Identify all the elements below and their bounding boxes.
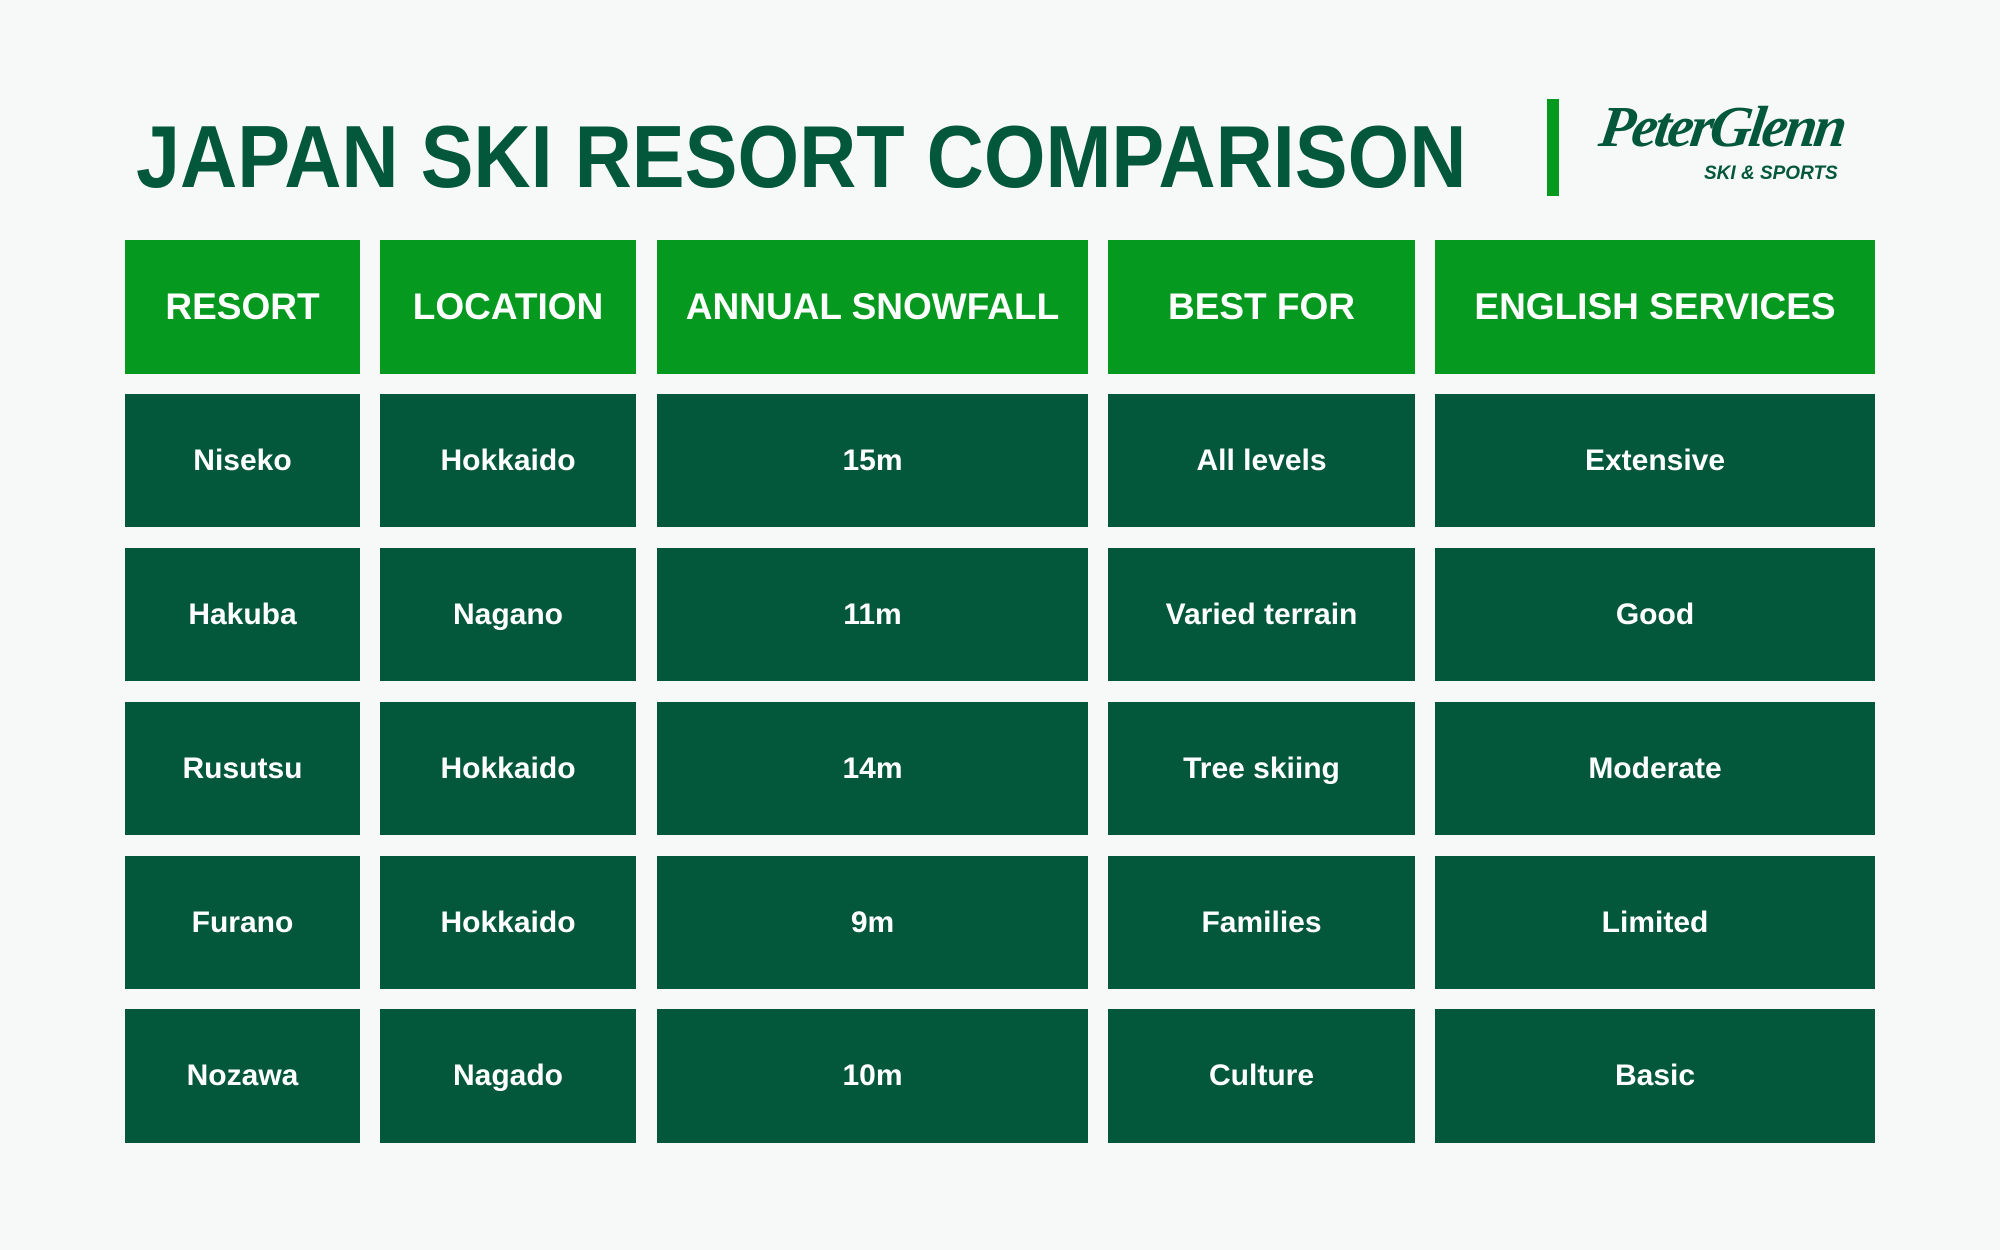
table: 15m	[842, 444, 903, 476]
table: Hokkaido	[440, 752, 576, 784]
row: Nozawa	[125, 1009, 1875, 1143]
table: BEST FOR	[1168, 286, 1355, 327]
logo: SKI & SPORTS	[1704, 163, 1838, 184]
table: Hokkaido	[440, 444, 576, 476]
table: Nagado	[453, 1059, 563, 1092]
row: Niseko	[125, 394, 1875, 527]
table: 14m	[842, 752, 903, 784]
logo: PeterGlenn	[1596, 94, 1848, 159]
table: Rusutsu	[182, 752, 302, 784]
row: Rusutsu	[125, 702, 1875, 835]
title: JAPAN SKI RESORT COMPARISON	[136, 107, 1466, 206]
table: RESORT	[165, 286, 320, 327]
table: Varied terrain	[1166, 598, 1357, 630]
table: 11m	[843, 598, 902, 630]
table: Tree skiing	[1183, 752, 1340, 784]
table: Hokkaido	[440, 906, 576, 938]
table: Limited	[1602, 906, 1708, 938]
table: Niseko	[193, 444, 292, 476]
header row	[125, 240, 1875, 374]
table: Nozawa	[187, 1059, 298, 1092]
table: Good	[1616, 598, 1694, 630]
divider bar	[1547, 99, 1559, 196]
table: Extensive	[1585, 444, 1725, 476]
table: LOCATION	[413, 286, 603, 327]
table: 9m	[851, 906, 894, 938]
table: Nagano	[453, 598, 563, 630]
table: All levels	[1196, 444, 1327, 476]
table: Culture	[1209, 1059, 1314, 1092]
row: Furano	[125, 856, 1875, 989]
table: 10m	[842, 1059, 903, 1092]
table: ENGLISH SERVICES	[1474, 286, 1836, 327]
table: ANNUAL SNOWFALL	[686, 286, 1059, 327]
row: Hakuba	[125, 548, 1875, 681]
table: Basic	[1615, 1059, 1695, 1092]
table: Hakuba	[188, 598, 297, 630]
table: Furano	[192, 906, 293, 938]
table: Moderate	[1588, 752, 1722, 784]
table: Families	[1201, 906, 1322, 938]
